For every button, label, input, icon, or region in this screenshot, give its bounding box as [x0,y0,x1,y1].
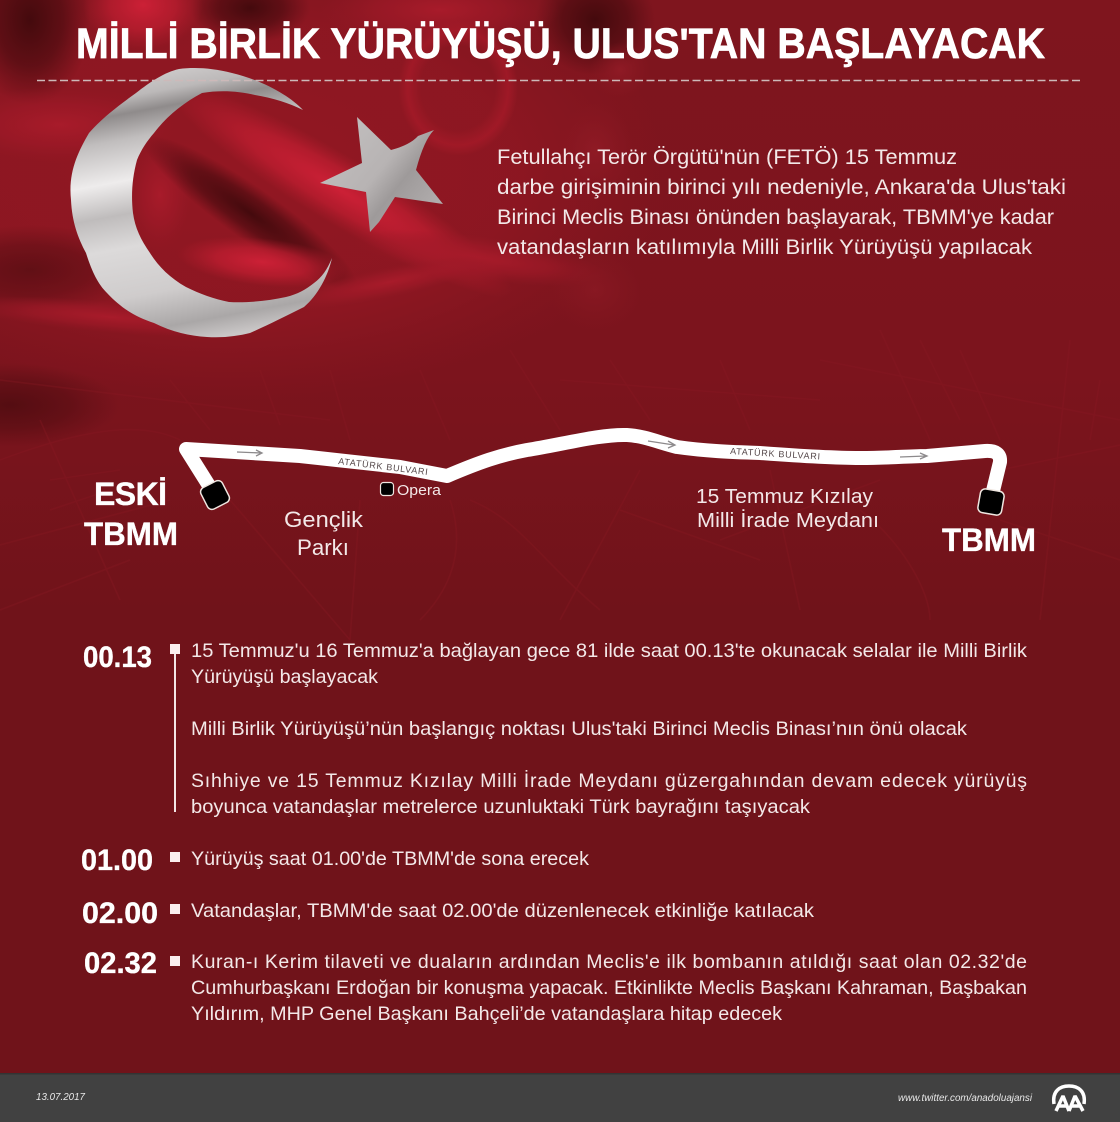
label: TBMM: TBMM [942,522,1036,558]
intro text: Fetullahçı Terör Örgütü'nün (FETÖ) 15 Temmuz [497,145,957,169]
entry: 01.00: Yürüyüş saat 01.00'de TBMM'de sona erecek [191,848,589,870]
intro text [497,145,1066,259]
label: 15 Temmuz Kızılay Milli İrade Meydanı: Milli İrade Meydanı [697,509,879,532]
entry: 01.00: 01.00 [81,844,153,877]
entry: 02.32: Cumhurbaşkanı Erdoğan bir konuşma yapacak. Etkinlikte Meclis Başkanı Kahraman, Başbakan [191,977,1027,999]
label: 15 Temmuz Kızılay Milli İrade Meydanı: 15 Temmuz Kızılay [696,486,873,508]
icon: star [320,117,443,232]
label: Opera: Opera [397,482,442,499]
entry: 00.13: 15 Temmuz'u 16 Temmuz'a bağlayan gece 81 ilde saat 00.13'te okunacak selalar ile Milli Birlik [191,640,1027,662]
entry: 02.32: Kuran-ı Kerim tilaveti ve duaların ardından Meclis'e ilk bombanın atıldığı saat olan 02.32'de [191,951,1027,973]
entry: 02.32 [84,947,1027,1025]
intro text: Birinci Meclis Binası önünden başlayarak, TBMM'ye kadar [497,205,1054,229]
route line [186,435,1000,495]
entry: 02.32: 02.32 [84,947,157,980]
timeline [81,640,1027,1025]
entry: 00.13: Milli Birlik Yürüyüşü’nün başlangıç noktası Ulus'taki Birinci Meclis Binası’nın önü olacak [191,718,967,740]
date: 13.07.2017 [36,1092,85,1103]
label: Eski TBMM [84,476,178,552]
marker: TBMM [977,488,1005,516]
title divider [37,80,1081,82]
title: MİLLİ BİRLİK YÜRÜYÜŞÜ, ULUS'TAN BAŞLAYACAK [76,20,1045,68]
entry: 00.13: Sıhhiye ve 15 Temmuz Kızılay Milli İrade Meydanı güzergahından devam edecek yürüyüş [191,769,1027,792]
label: 15 Temmuz Kızılay Milli İrade Meydanı [696,486,879,532]
street label right: ATATÜRK BULVARI [730,446,820,461]
direction arrows [237,441,927,459]
label: Eski TBMM: TBMM [84,516,178,552]
entry: 00.13: 00.13 [83,641,152,674]
entry: 00.13 [83,640,1027,818]
label: Gençlik Parkı: Parkı [297,535,349,560]
entry: 02.00: 02.00 [82,897,158,930]
marker: Opera [380,482,394,496]
entry: 00.13: Yürüyüşü başlayacak [191,666,378,688]
label: Eski TBMM: ESKİ [94,476,167,512]
label: Gençlik Parkı [284,507,364,560]
label: Gençlik Parkı: Gençlik [284,507,364,532]
entry: 02.00: Vatandaşlar, TBMM'de saat 02.00'de düzenlenecek etkinliğe katılacak [191,900,814,922]
footer [0,1073,1120,1122]
street label left: ATATÜRK BULVARI [338,456,428,477]
intro text: darbe girişiminin birinci yılı nedeniyle, Ankara'da Ulus'taki [497,175,1066,199]
entry: 01.00 [81,844,589,877]
marker: Eski TBMM [199,479,231,511]
entry: 02.32: Yıldırım, MHP Genel Başkanı Bahçeli’de vatandaşlara hitap edecek [191,1003,782,1025]
icon: Anadolu Agency logo [1054,1086,1084,1111]
intro text: vatandaşların katılımıyla Milli Birlik Yürüyüşü yapılacak [497,235,1032,259]
entry: 02.00 [82,897,814,930]
entry: 00.13: boyunca vatandaşlar metrelerce uzunluktaki Türk bayrağını taşıyacak [191,796,810,818]
icon: crescent [70,68,332,337]
social link: www.twitter.com/anadoluajansi [898,1093,1033,1104]
route map [84,435,1036,560]
